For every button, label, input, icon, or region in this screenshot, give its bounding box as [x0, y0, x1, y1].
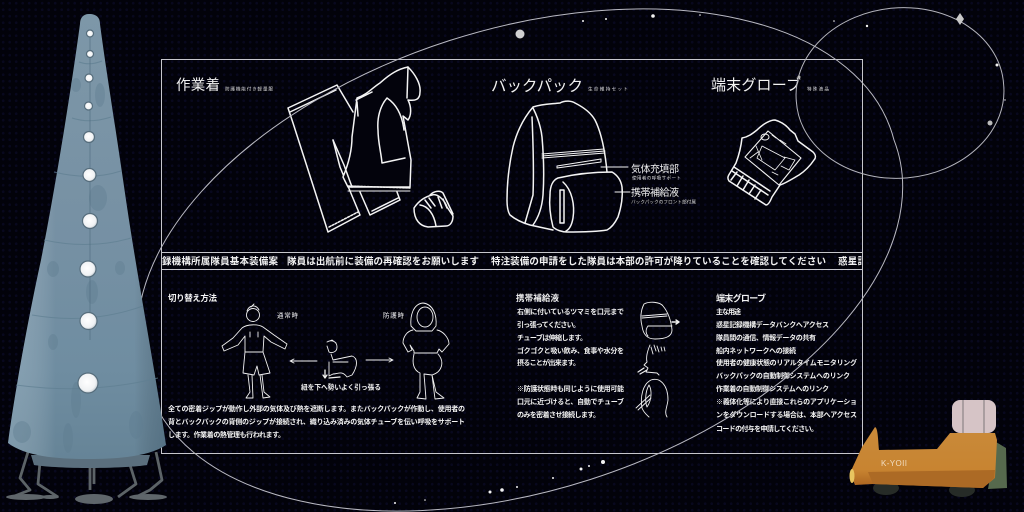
- portholes: [78, 30, 98, 393]
- section: terminal glove uses: ※義体化等により直接これらのアプリケーショ: [716, 397, 857, 406]
- rocket legs: [12, 452, 162, 497]
- hull centre seam: [89, 30, 91, 340]
- section: work wear heading: 防護機能付き軽量服: [225, 86, 273, 92]
- section: terminal glove uses: ンをダウンロードする場合は、本部へアクセス: [716, 410, 857, 419]
- label: portable supply: 携帯補給液: [631, 186, 679, 199]
- section: portable supply instructions: ※防護状態時も同じように使用可能: [517, 384, 624, 393]
- vehicle body: [850, 427, 997, 488]
- section: portable supply instructions: 口元に近づけると、自動でチューブ: [517, 397, 624, 406]
- info frame: [161, 60, 862, 454]
- label: portable supply: [631, 186, 696, 206]
- paragraph: switching description: 背とバックパックの背側のジップが接続され、織り込み済みの気体チューブを伝い呼吸をサポート: [168, 417, 465, 426]
- section: terminal glove uses: [716, 292, 857, 433]
- figure: normal state: [222, 304, 287, 398]
- section: portable supply instructions: 摂ることが出来ます。: [517, 358, 580, 367]
- label: gas filling: 気体充填部: [631, 162, 679, 176]
- paragraph: switching description: [168, 404, 465, 439]
- section: terminal glove uses: 隊員間の通信、情報データの共有: [716, 333, 816, 342]
- backpack subtitle: 生命維持セット: [588, 86, 628, 92]
- section: switching method: 防護時: [383, 310, 404, 320]
- paragraph: switching description: 全ての密着ジップが動作し外部の気体及び熱を遮断します。またバックパックが作動し、使用者の: [168, 404, 465, 413]
- cargo pod: [952, 400, 996, 433]
- vehicle rear greenery: [988, 442, 1007, 489]
- icon: drinking from tube: [638, 345, 665, 375]
- figure: pulling cord: [323, 340, 356, 378]
- section: portable supply instructions: チューブは伸縮します。: [517, 333, 587, 342]
- section: switching method: [168, 293, 404, 392]
- vehicle K-Y011: [850, 400, 1007, 497]
- orbit: small ellipse: [796, 8, 1004, 178]
- scrolling notice strip: 惑星記: [838, 256, 867, 268]
- section: switching method: 切り替え方法: [168, 293, 217, 303]
- section: terminal glove uses: コードの付与を申請してください。: [716, 424, 818, 433]
- section: work wear heading: [176, 77, 273, 94]
- label: gas filling: 使用者の呼吸サポート: [632, 174, 681, 182]
- section: terminal glove uses: 惑星記録機構データバンクへアクセス: [716, 320, 829, 329]
- scrolling notice strip: 隊員は出航前に装備の再確認をお願いします: [287, 256, 479, 268]
- rocket skirt: [31, 455, 150, 468]
- rocket: [6, 14, 167, 504]
- illustration: work wear: [288, 67, 453, 232]
- vehicle headlight: [850, 469, 854, 483]
- paragraph: switching description: します。作業着の熱管理も行われます。: [168, 430, 285, 439]
- label: portable supply: バックパックのフロント部付属: [631, 198, 696, 206]
- section: terminal glove uses: 使用者の健康状態のリアルタイムモニタリング: [716, 358, 857, 367]
- section: portable supply instructions: 引っ張ってください。: [517, 320, 580, 329]
- section: portable supply instructions: 右側に付いているツマミを口元まで: [517, 307, 624, 316]
- arrow: left: [290, 359, 317, 363]
- icon: backpack zipper pull: [641, 302, 679, 339]
- section: switching method: 紐を下へ勢いよく引っ張る: [301, 382, 381, 392]
- figure: protected state: [403, 303, 449, 399]
- vehicle lower stripe: [868, 470, 995, 488]
- section: switching method: 通常時: [277, 310, 298, 320]
- scrolling notice strip: 特注装備の申請をした隊員は本部の許可が降りていることを確認してください: [491, 256, 826, 268]
- hull bands: [16, 61, 158, 389]
- scrolling notice strip: [162, 256, 862, 266]
- section: terminal glove uses: 主な用途: [716, 307, 741, 316]
- section: glove heading: 端末グローブ: [711, 76, 801, 94]
- illustration: terminal glove: [728, 120, 815, 205]
- glove subtitle: 特殊液晶: [807, 86, 829, 92]
- section: terminal glove uses: 船内ネットワークへの接続: [716, 346, 796, 355]
- scrolling notice strip: 録機構所属隊員基本装備案: [162, 256, 278, 268]
- stars and satellites: [394, 13, 1006, 504]
- section: portable supply instructions: [516, 293, 624, 419]
- icon: hooded tube connection: [636, 379, 668, 417]
- illustration: backpack: [507, 101, 630, 232]
- arrow: right: [366, 358, 393, 362]
- section: terminal glove uses: 端末グローブ: [716, 292, 766, 304]
- rocket hull: [8, 14, 166, 459]
- orbit: large ellipse: [137, 9, 903, 511]
- section: terminal glove uses: バックパックの自動制御システムへのリンク: [716, 371, 850, 380]
- vehicle name: K-YOII: [881, 459, 907, 468]
- label: gas filling: [631, 162, 681, 182]
- vehicle wheels: [873, 481, 975, 497]
- section: backpack heading: バックパック: [491, 77, 583, 95]
- section: work wear heading: 作業着: [176, 77, 220, 94]
- hull stains: [13, 78, 143, 453]
- section: portable supply instructions: のみを密着させ接続します。: [517, 410, 600, 419]
- section: terminal glove uses: 作業着の自動制御システムへのリンク: [716, 384, 829, 393]
- section: portable supply instructions: ゴクゴクと吸い飲み、食事や水分を: [517, 346, 624, 355]
- rocket feet: [6, 494, 167, 504]
- section: portable supply instructions: 携帯補給液: [516, 293, 559, 303]
